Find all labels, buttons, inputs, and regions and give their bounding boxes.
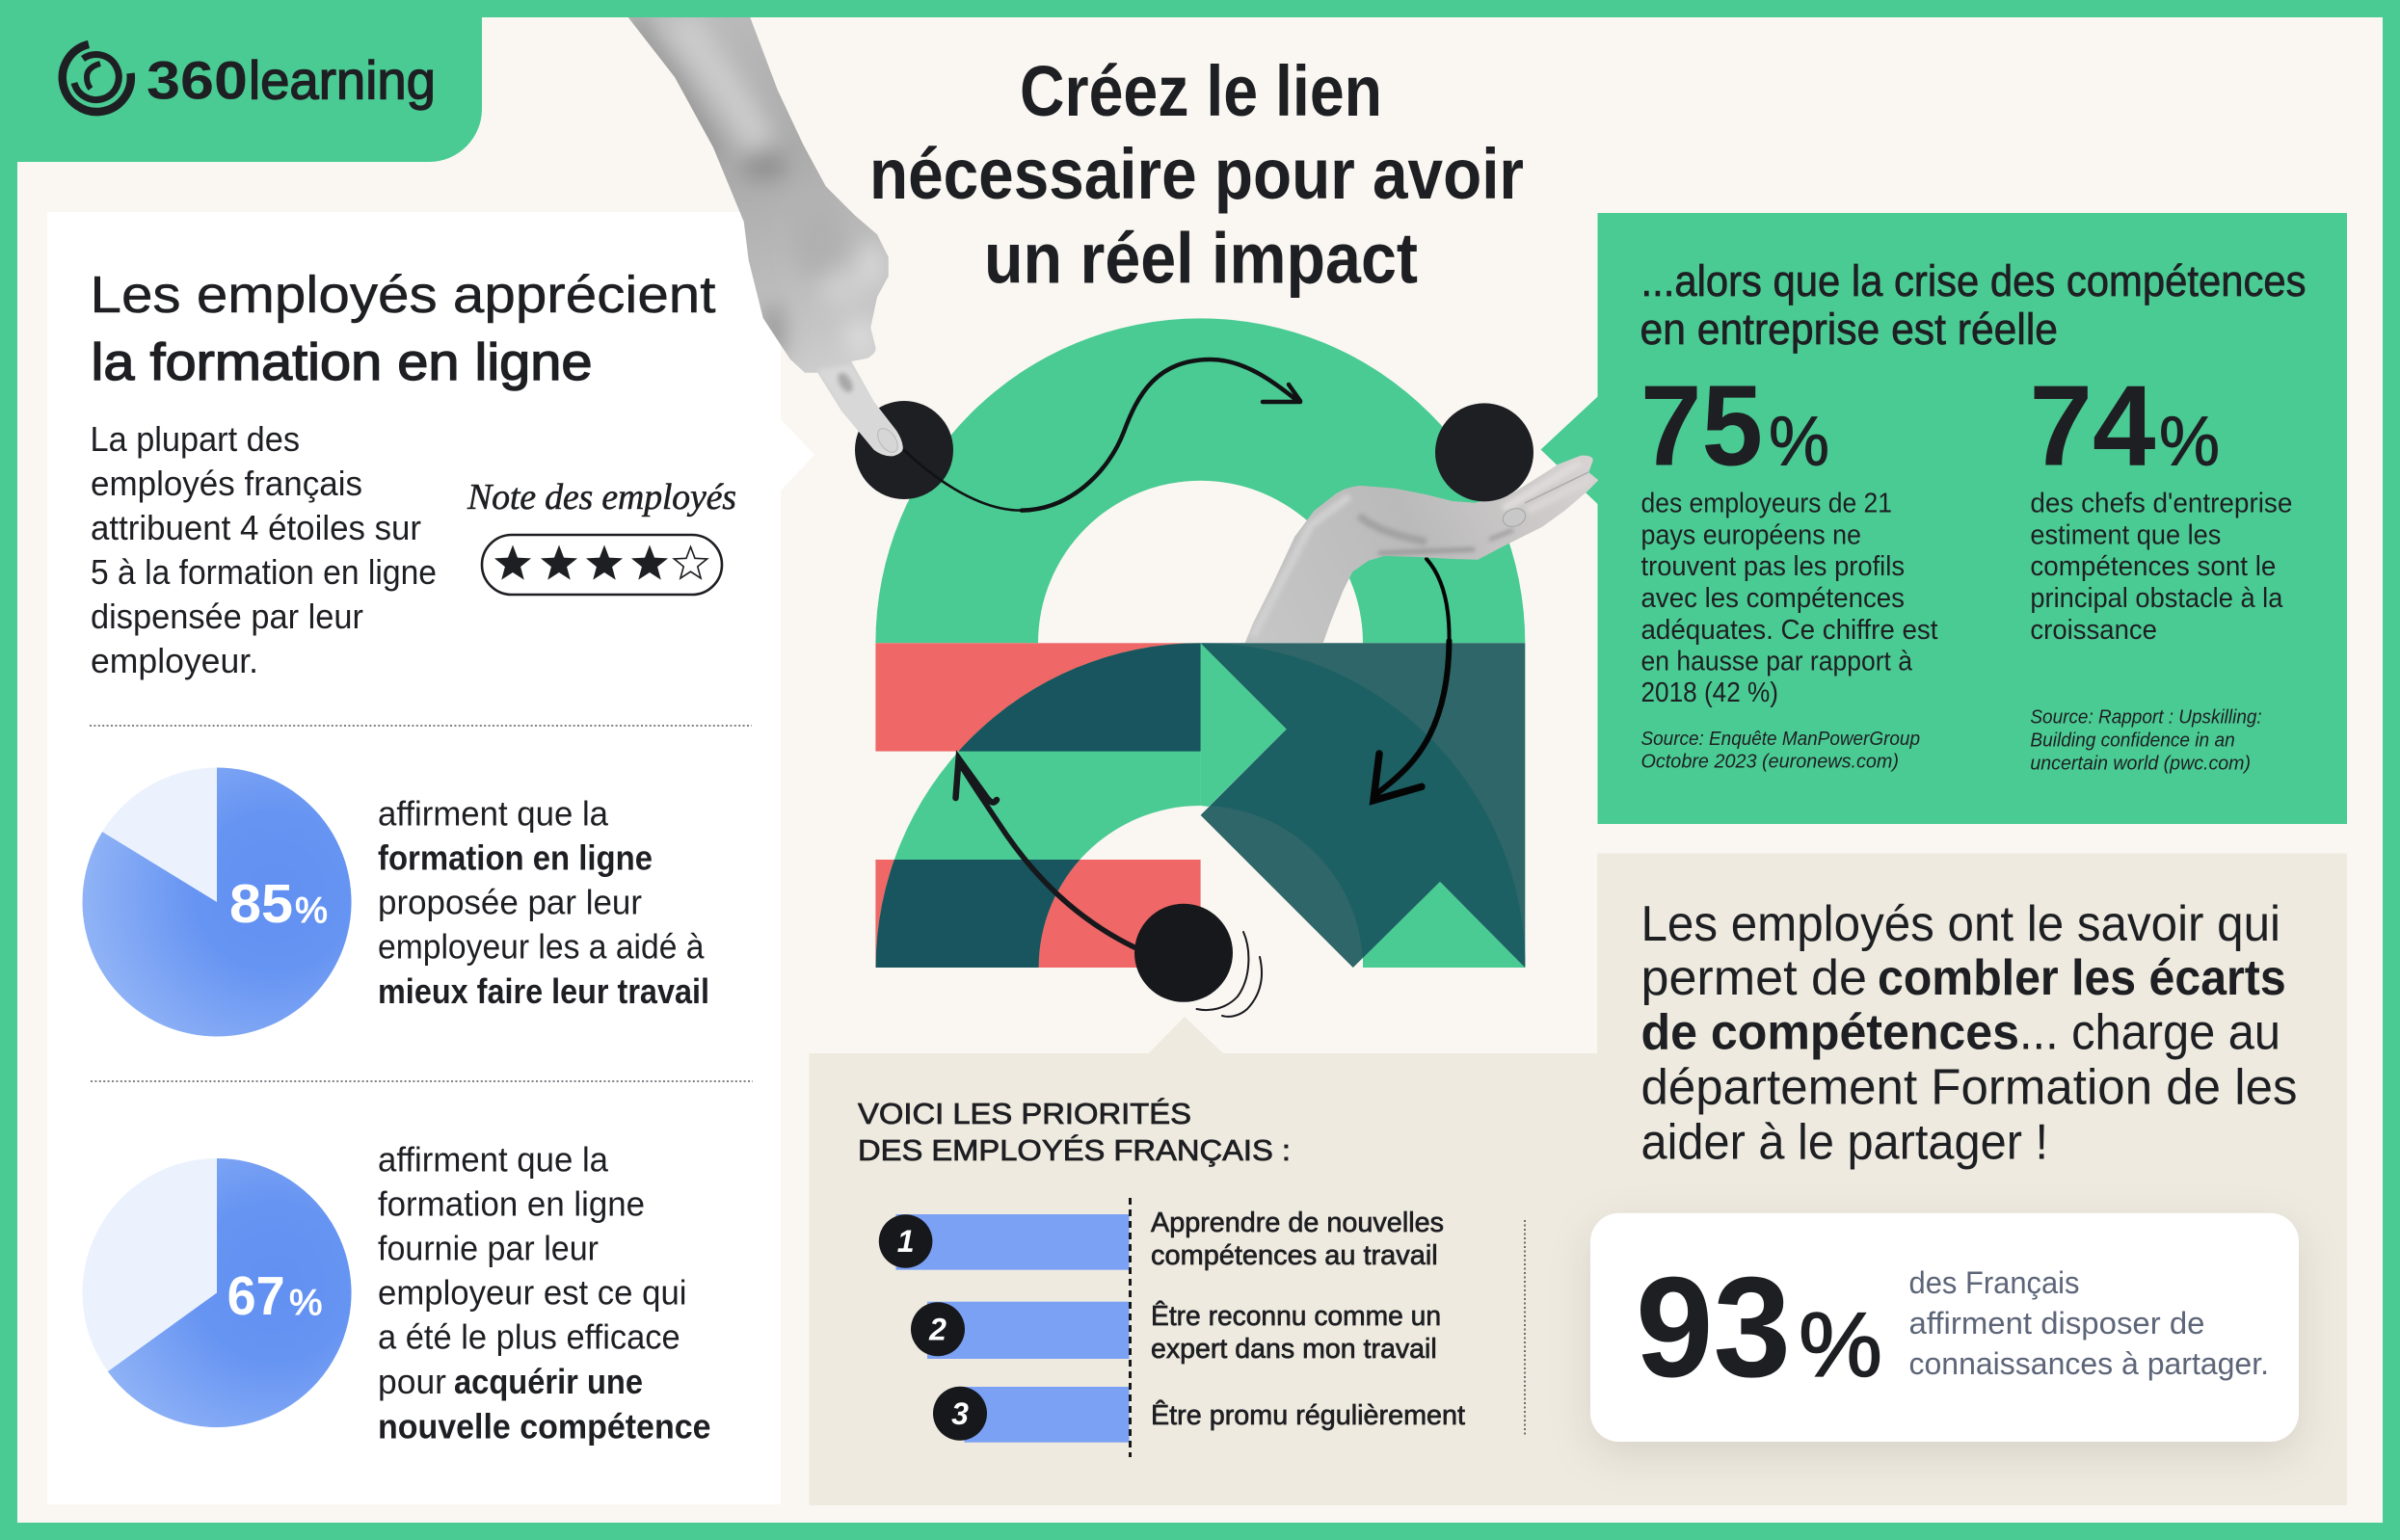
text: 74% statement: principal obstacle à la	[2030, 583, 2283, 614]
beige panel statement: combler les écarts	[1878, 950, 2286, 1006]
stat: 93%: %	[1799, 1294, 1882, 1396]
ball: held in open hand	[1435, 403, 1533, 501]
priorities labels: Apprendre de nouvelles	[1151, 1208, 1444, 1238]
left panel intro text: attribuent 4 étoiles sur	[91, 508, 421, 547]
text: 74% statement: croissance	[2030, 615, 2157, 646]
text: 67% statement: fournie par leur	[378, 1228, 599, 1268]
icon: pointing hand photo	[628, 17, 903, 457]
text: 93% statement: connaissances à partager.	[1908, 1346, 2269, 1381]
left panel heading: la formation en ligne	[91, 333, 592, 391]
source: 75%	[1640, 729, 1920, 773]
panel: left white panel	[47, 212, 814, 1504]
icon: open hand photo	[1239, 448, 1605, 646]
text: 75% statement: trouvent pas les profils	[1640, 551, 1905, 582]
green panel heading: ...alors que la crise des compétences	[1640, 256, 2306, 305]
text: 85% statement	[378, 794, 709, 1011]
text: 74% statement: estiment que les	[2030, 519, 2221, 550]
logo tab	[0, 0, 482, 162]
title: un réel impact	[984, 218, 1418, 298]
text: 74% statement: compétences sont le	[2030, 551, 2276, 582]
left panel intro text: employeur.	[91, 641, 258, 680]
title	[869, 51, 1524, 298]
bar 1	[879, 1214, 1130, 1270]
source: 75%: Octobre 2023 (euronews.com)	[1640, 752, 1899, 773]
red bands	[875, 643, 1201, 968]
text: 74% statement: des chefs d'entreprise	[2030, 489, 2292, 519]
pie chart: 85%: 85	[229, 873, 293, 935]
text: 85% statement: employeur les a aidé à	[378, 927, 705, 966]
green panel heading: en entreprise est réelle	[1640, 305, 2058, 354]
arrow: top curved arrow	[904, 359, 1300, 511]
title: nécessaire pour avoir	[869, 134, 1524, 214]
priorities heading: VOICI LES PRIORITÉS	[858, 1097, 1191, 1130]
bar 3: 3	[951, 1396, 969, 1431]
text: 75% statement: 2018 (42 %)	[1640, 677, 1778, 708]
priorities labels	[1151, 1208, 1465, 1431]
text: 93% statement: des Français	[1908, 1265, 2080, 1300]
bottom right green triangle	[1363, 882, 1525, 968]
text: 85% statement: formation en ligne	[378, 838, 653, 877]
rating label: Note des employés: Note des employés	[467, 477, 736, 518]
logo: 360learning: 360	[147, 50, 248, 110]
text: 67% statement: pour	[378, 1362, 446, 1401]
text: 75% statement	[1640, 489, 1937, 708]
left panel intro text: La plupart des	[91, 419, 300, 459]
pie chart: 67%: 67	[227, 1265, 285, 1327]
stat: 74%: %	[2159, 404, 2220, 481]
text: 67% statement: a été le plus efficace	[378, 1316, 680, 1357]
bar chart: priorities	[879, 1214, 1130, 1443]
text: 93% statement	[1908, 1265, 2269, 1381]
text: 85% statement: affirment que la	[378, 794, 609, 833]
ball: bottom	[1134, 904, 1233, 1002]
dark overlap of ring and bands	[876, 643, 1201, 968]
text: 75% statement: avec les compétences	[1640, 583, 1905, 614]
top green arch	[875, 318, 1525, 643]
text: 75% statement: des employeurs de 21	[1640, 489, 1892, 519]
stat: 74%: 74	[2030, 362, 2155, 491]
beige panel statement: permet de	[1640, 950, 1867, 1006]
priorities labels: Être reconnu comme un	[1151, 1300, 1441, 1332]
text: 67% statement: nouvelle compétence	[378, 1407, 711, 1446]
priorities labels: expert dans mon travail	[1151, 1334, 1437, 1365]
pie chart: 67%	[83, 1158, 352, 1427]
text: 85% statement: mieux faire leur travail	[378, 971, 709, 1011]
rating: four out of five stars	[482, 535, 722, 595]
left panel heading	[91, 266, 715, 391]
logo: 360learning	[63, 44, 436, 112]
panel: green skills crisis panel	[1540, 213, 2347, 824]
arrow: bottom left curved arrow	[956, 758, 1134, 947]
icon: logo rings	[63, 44, 131, 112]
stat: 93%: 93	[1636, 1248, 1791, 1407]
beige panel statement: aider à le partager !	[1640, 1114, 2048, 1170]
beige panel statement: département Formation de les	[1640, 1060, 2298, 1116]
source: 74%: Source: Rapport : Upskilling:	[2030, 707, 2262, 729]
green quarter ring with arrow head	[876, 643, 1287, 968]
left panel intro text: 5 à la formation en ligne	[91, 552, 437, 592]
priorities labels: compétences au travail	[1151, 1240, 1438, 1271]
darker teal ring inside chevron	[1201, 643, 1526, 968]
card: 93% statistic	[1590, 1213, 2299, 1442]
pie chart: 85%: %	[295, 890, 328, 931]
stat: 75%: 75	[1640, 362, 1763, 491]
text: 67% statement: formation en ligne	[378, 1183, 645, 1224]
text: 67% statement: affirment que la	[378, 1139, 609, 1180]
panel: priorities and knowledge beige panel	[810, 854, 2347, 1505]
central arch and arrows graphic	[875, 318, 1526, 968]
stat: 74%	[2030, 362, 2220, 491]
beige panel statement: Les employés ont le savoir qui	[1640, 896, 2280, 952]
bar 1: 1	[897, 1224, 914, 1259]
source: 75%: Source: Enquête ManPowerGroup	[1640, 729, 1920, 750]
text: 75% statement: en hausse par rapport à	[1640, 647, 1913, 677]
arrow: right curved arrow	[1373, 559, 1450, 801]
text: 74% statement	[2030, 489, 2292, 646]
text: 67% statement	[378, 1139, 711, 1446]
ball: top left	[855, 401, 953, 499]
left panel heading: Les employés apprécient	[91, 266, 715, 324]
left panel intro text: dispensée par leur	[91, 597, 363, 636]
bar 3	[933, 1387, 1130, 1443]
stat: 75%	[1640, 362, 1829, 491]
beige panel statement: ... charge au	[2019, 1004, 2280, 1060]
text: 67% statement: acquérir une	[454, 1362, 643, 1401]
source: 74%: uncertain world (pwc.com)	[2030, 753, 2251, 774]
pie chart: 67%: %	[289, 1283, 322, 1323]
text: 75% statement: adéquates. Ce chiffre est	[1640, 615, 1937, 646]
source: 74%: Building confidence in an	[2030, 730, 2235, 752]
priorities heading: DES EMPLOYÉS FRANÇAIS :	[858, 1133, 1291, 1167]
stat: 75%: %	[1769, 404, 1829, 481]
logo: 360learning: learning	[249, 50, 436, 110]
stat: 93%	[1636, 1248, 1882, 1407]
icon: motion lines by ball	[1197, 932, 1262, 1017]
green panel heading	[1640, 256, 2306, 354]
priorities labels: Être promu régulièrement	[1151, 1399, 1465, 1431]
text: 75% statement: pays européens ne	[1640, 519, 1861, 550]
pie chart: 85%	[83, 767, 352, 1037]
beige panel statement	[1640, 896, 2298, 1170]
beige panel statement: de compétences	[1640, 1004, 2019, 1060]
left panel intro text	[91, 419, 437, 680]
teal chevron	[1201, 643, 1525, 968]
left panel intro text: employés français	[91, 464, 362, 503]
source: 74%	[2030, 707, 2262, 774]
bar 2	[911, 1302, 1130, 1359]
priorities heading	[858, 1097, 1291, 1167]
text: 85% statement: proposée par leur	[378, 883, 642, 921]
text: 93% statement: affirment disposer de	[1908, 1306, 2205, 1341]
bar 2: 2	[928, 1313, 947, 1347]
title: Créez le lien	[1020, 51, 1382, 131]
text: 67% statement: employeur est ce qui	[378, 1272, 686, 1313]
